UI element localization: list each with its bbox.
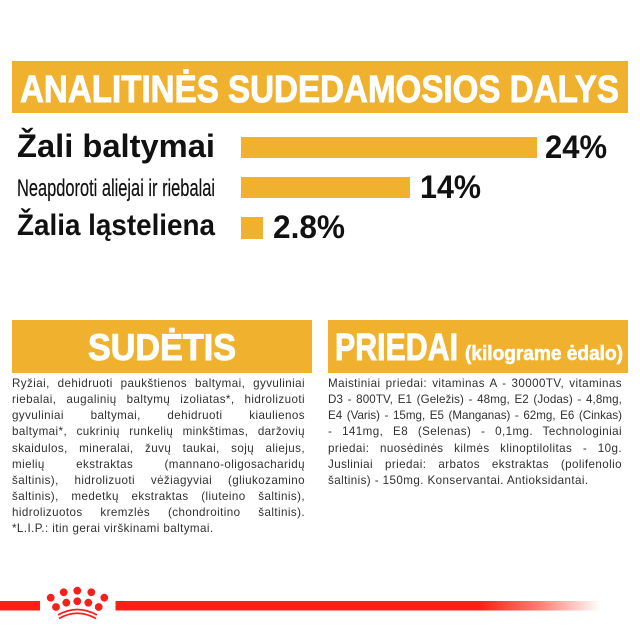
- heading: PRIEDAI: (kilograme ėdalo): [465, 343, 623, 365]
- heading: SUDĖTIS: SUDĖTIS: [88, 327, 236, 368]
- text block: composition: šaltinis), medetkų ekstraktas (liuteino šaltinis),: [12, 490, 305, 503]
- row: Žalia ląsteliena 2.8%: [17, 208, 345, 245]
- row: Neapdoroti aliejai ir riebalai 14%: Neapdoroti aliejai ir riebalai: [17, 175, 215, 202]
- text block: composition: riebalai, augalinių baltymų izoliatas*, hidrolizuoti: [12, 393, 305, 406]
- text block: composition: skaidulos, mineralai, žuvų taukai, sojų aliejus,: [12, 442, 305, 455]
- text block: additives: [328, 377, 622, 487]
- text block: additives: priedai: nuosėdinės kilmės klinoptilolitas - 10g.: [328, 442, 622, 455]
- text block: additives: D3 - 800TV, E1 (Geležis) - 48mg, E2 (Jodas) - 4,8mg,: [328, 393, 622, 406]
- text block: additives: šaltinis) - 150mg. Konservantai. Antioksidantai.: [328, 474, 589, 487]
- text block: additives: Maistiniai priedai: vitaminas A - 30000TV, vitaminas: [328, 377, 622, 390]
- text block: composition: hidrolizuotos kremzlės (chondroitino šaltinis).: [12, 506, 305, 519]
- text block: composition: [12, 377, 305, 535]
- footer red stripe left: [0, 601, 40, 610]
- footer red stripe right: [116, 601, 600, 610]
- text block: composition: mielių ekstraktas (mannano-oligosacharidų: [12, 458, 305, 471]
- text block: composition: Ryžiai, dehidruoti paukštienos baltymai, gyvuliniai: [12, 377, 305, 390]
- text block: composition: baltymai*, cukrinių runkelių minkštimas, daržovių: [12, 425, 305, 438]
- heading: PRIEDAI: PRIEDAI: [335, 327, 458, 369]
- row: Žali baltymai 24%: [17, 128, 607, 165]
- row: Žalia ląsteliena 2.8%: Žalia ląsteliena: [17, 208, 215, 242]
- heading: SUDĖTIS: [12, 320, 312, 373]
- row: Neapdoroti aliejai ir riebalai 14%: 14%: [420, 169, 481, 205]
- row: Žalia ląsteliena 2.8%: 2.8%: [273, 209, 345, 245]
- heading: PRIEDAI: [328, 320, 628, 373]
- text block: composition: šaltinis), hidrolizuoti vėžiagyviai (gliukozamino: [12, 474, 305, 487]
- icon: crown logo: [47, 587, 108, 618]
- text block: composition: *L.I.P.: itin gerai virškinami baltymai.: [12, 522, 214, 535]
- row: Žali baltymai 24%: 24%: [545, 129, 607, 165]
- text block: composition: gyvuliniai baltymai, dehidruoti kiaulienos: [12, 409, 305, 422]
- row: Neapdoroti aliejai ir riebalai 14%: [17, 169, 481, 205]
- row: Žali baltymai 24%: Žali baltymai: [17, 128, 215, 164]
- text block: additives: Jusliniai priedai: arbatos ekstraktas (polifenolio: [328, 458, 622, 471]
- text block: additives: E4 (Varis) - 15mg, E5 (Manganas) - 62mg, E6 (Cinkas): [328, 409, 622, 422]
- text block: additives: - 141mg, E8 (Selenas) - 0,1mg. Technologiniai: [328, 425, 622, 438]
